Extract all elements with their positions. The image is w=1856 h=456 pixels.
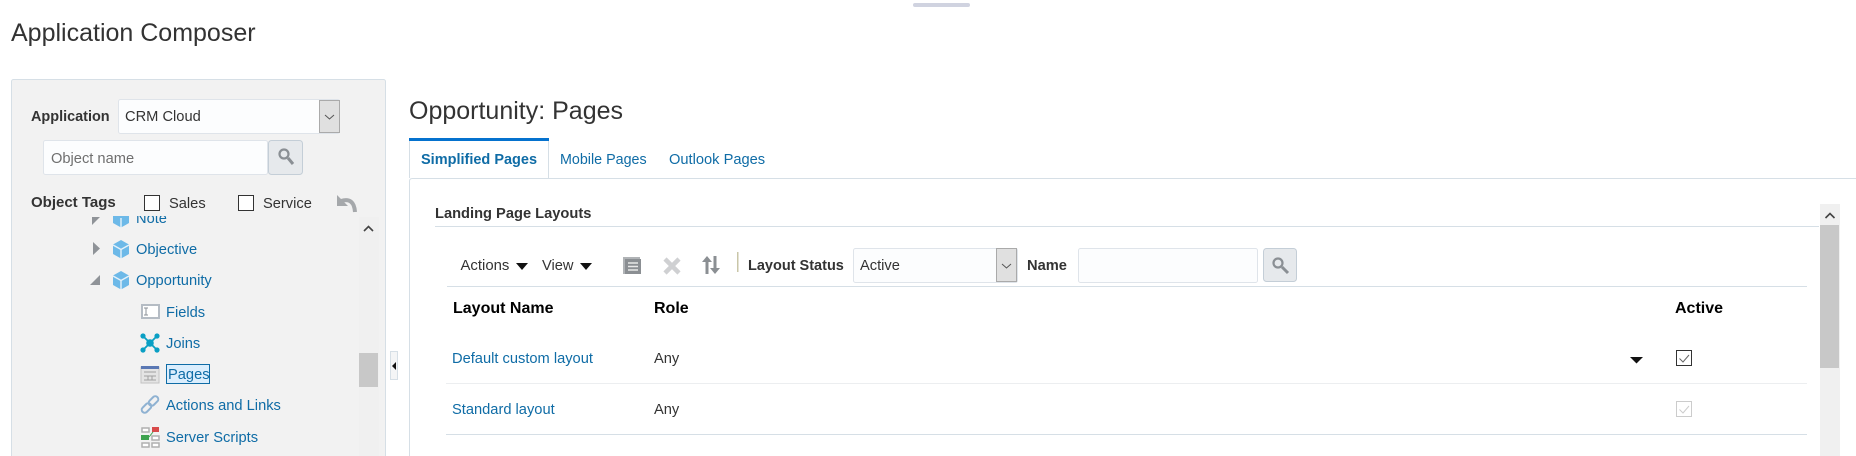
table header	[453, 300, 1723, 317]
checkbox: sales	[144, 196, 206, 212]
heading: opportunity pages: Opportunity: Pages	[409, 97, 623, 125]
tree: pages (selected)	[141, 364, 210, 384]
tree: server scripts	[141, 427, 258, 447]
row: standard layout: Standard layout	[452, 402, 555, 418]
tree: pages (selected): Pages	[168, 367, 210, 383]
tree: joins: Joins	[166, 336, 200, 352]
toolbar	[460, 248, 1296, 282]
application label: Application	[31, 109, 110, 125]
icon: search button	[268, 140, 302, 174]
tree: fields: Fields	[166, 305, 205, 321]
panel: landing page layouts	[410, 178, 1856, 456]
tree: opportunity: Opportunity	[136, 273, 212, 289]
application select: CRM Cloud	[125, 109, 201, 125]
section heading: Landing Page Layouts	[435, 206, 591, 222]
icon: undo	[337, 195, 355, 212]
tree: joins	[140, 333, 200, 353]
row: default custom layout: Default custom layout	[452, 351, 593, 367]
checkbox: service: Service	[263, 196, 312, 212]
tree: note row (clipped)	[92, 211, 167, 228]
tree: opportunity	[90, 271, 212, 290]
table header: Role	[654, 300, 689, 317]
tree: note row (clipped): Note	[136, 211, 167, 227]
object name search input	[44, 140, 268, 174]
table header: Active	[1675, 300, 1723, 317]
drag handle	[913, 3, 970, 7]
layout status select: Active	[860, 258, 900, 274]
object name search input: Object name	[51, 151, 134, 167]
title: Application Composer	[11, 19, 256, 47]
application select	[118, 100, 340, 134]
table	[446, 300, 1807, 435]
icon: detach	[623, 257, 641, 274]
actions menu: Actions	[460, 258, 509, 274]
name label: Name	[1027, 258, 1067, 274]
icon: reorder arrows	[702, 256, 720, 274]
checkbox: service	[238, 196, 312, 212]
splitter collapse handle	[390, 352, 398, 380]
icon: delete	[665, 259, 679, 273]
row: standard layout	[452, 402, 1692, 418]
layout status label: Layout Status	[748, 258, 844, 274]
row: standard layout: Any	[654, 402, 680, 418]
row: default custom layout: Any	[654, 351, 680, 367]
checkbox: sales: Sales	[169, 196, 206, 212]
tabs: Mobile Pages	[560, 152, 647, 168]
tabs	[409, 138, 765, 178]
panel: application navigator	[12, 80, 386, 456]
tree: objective	[93, 240, 197, 258]
content scrollbar	[1820, 204, 1840, 456]
name input	[1078, 248, 1258, 282]
tree: actions and links	[140, 395, 281, 414]
view menu: View	[542, 258, 574, 274]
navigator scrollbar	[359, 217, 379, 456]
tree: objective: Objective	[136, 242, 197, 258]
table header: Layout Name	[453, 300, 554, 317]
tabs: Outlook Pages	[669, 152, 765, 168]
icon: name search button	[1264, 248, 1296, 282]
tree: fields	[142, 305, 205, 321]
row: default custom layout	[452, 350, 1692, 367]
tree: server scripts: Server Scripts	[166, 430, 258, 446]
layout status select	[854, 248, 1018, 282]
tabs: Simplified Pages	[421, 152, 537, 168]
object tags label: Object Tags	[31, 194, 116, 211]
tree: actions and links: Actions and Links	[166, 398, 281, 414]
view menu	[542, 258, 592, 274]
